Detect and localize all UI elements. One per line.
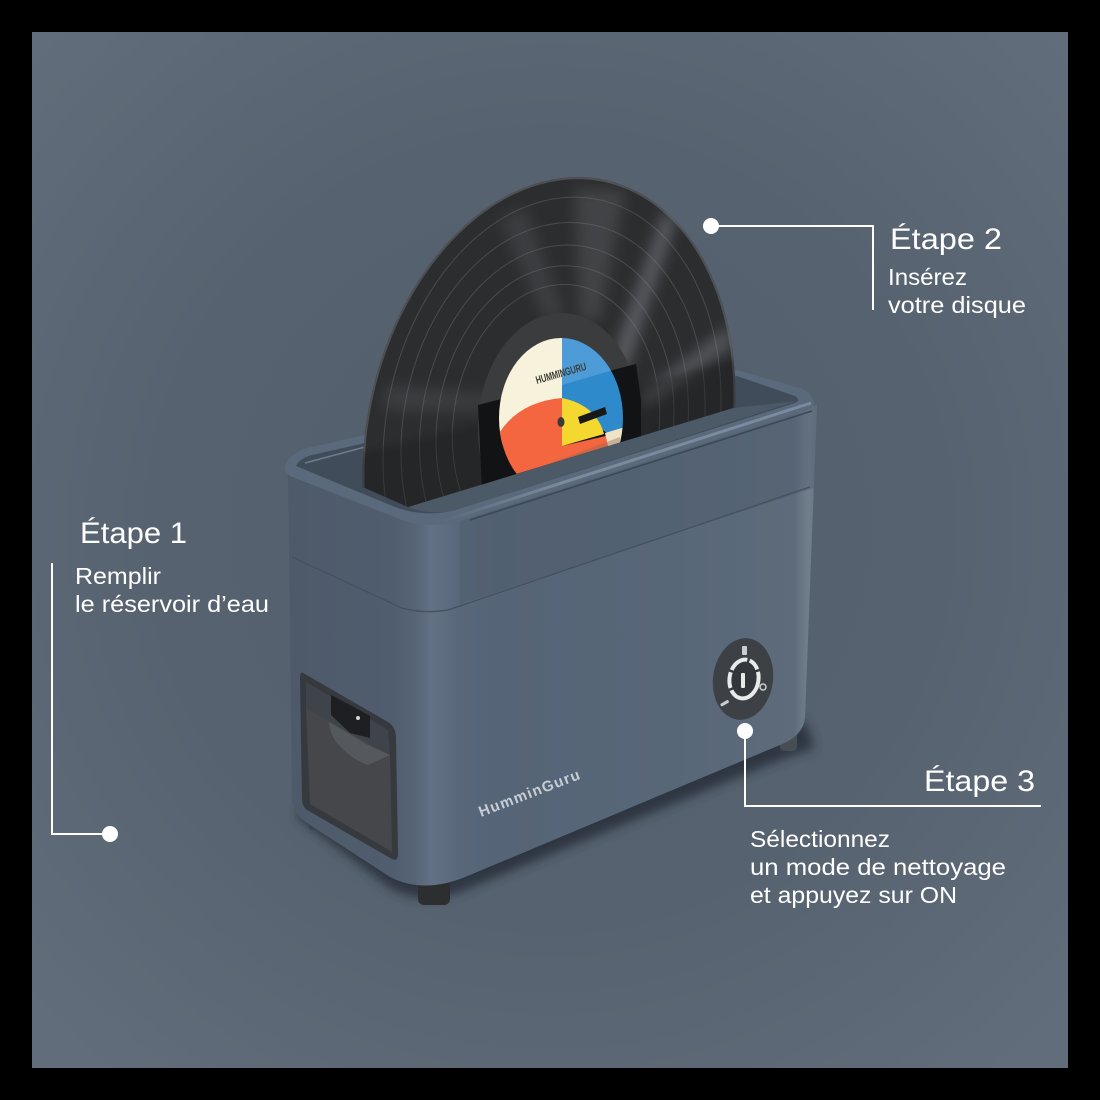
lower inner floor (408, 401, 797, 512)
callout: étape 3 (737, 723, 1041, 908)
power mark (741, 673, 745, 688)
body 1: le réservoir d’eau (75, 591, 269, 617)
anchor dot 1 (102, 826, 118, 842)
device left face (296, 521, 460, 886)
hatch frame (300, 673, 398, 860)
record label (499, 338, 623, 474)
heading 1: Étape 1 (80, 517, 187, 550)
front rim highlight (440, 403, 811, 522)
top rim (285, 370, 814, 525)
pump highlight (356, 716, 360, 720)
dial (708, 634, 778, 724)
floor shadow (298, 720, 815, 898)
body 3: et appuyez sur ON (750, 882, 957, 908)
upper section shading (796, 405, 817, 493)
heading 2: Étape 2 (890, 223, 1002, 256)
label: spindle hole (558, 417, 564, 427)
dial ring (727, 658, 761, 700)
mode icon right (760, 684, 766, 690)
label: sticker (578, 407, 607, 424)
product: record cleaning machine (280, 141, 830, 910)
callout: étape 1 (52, 517, 269, 842)
body 2: votre disque (888, 292, 1026, 318)
callout: étape 2 (703, 218, 1026, 318)
mode icon top (742, 646, 747, 655)
label: brand text: HUMMINGURU (535, 361, 588, 387)
device body (296, 405, 817, 886)
sheen wedges (355, 190, 745, 520)
feet (309, 730, 797, 905)
dead wax (478, 314, 628, 455)
leader line 2 (711, 226, 873, 310)
leader line 1 (52, 563, 110, 834)
label: yellow quadrant (562, 398, 604, 446)
rim shadow line (470, 411, 812, 520)
body 3: Sélectionnez (750, 826, 890, 852)
body 3: un mode de nettoyage (750, 854, 1006, 880)
hatch interior (306, 682, 390, 755)
inner lip highlight (305, 447, 365, 463)
body 1: Remplir (75, 563, 161, 589)
label: blue quadrant (562, 338, 623, 442)
label: cream quadrant (495, 335, 562, 445)
label: cream corner (605, 428, 622, 446)
brand logo: HumminGuru (476, 767, 582, 821)
label: orange arc (500, 398, 612, 474)
anchor dot 3 (737, 723, 753, 739)
anchor dot 2 (703, 218, 719, 234)
tank window (306, 708, 392, 852)
control panel (708, 634, 778, 724)
device front face (460, 405, 817, 879)
pump detail (331, 695, 370, 738)
grooves (382, 196, 722, 506)
disc (362, 177, 736, 507)
opening interior (296, 376, 798, 513)
heading 3: Étape 3 (924, 765, 1035, 798)
seam line (292, 487, 810, 612)
disc edge (362, 177, 736, 488)
tank tab (329, 722, 390, 765)
vinyl record (362, 177, 736, 507)
body 2: Insérez (888, 264, 967, 290)
dead wax shadow band (478, 364, 641, 484)
water tank hatch (300, 673, 398, 860)
lower shadow band (362, 360, 736, 507)
leader line 3 (745, 732, 1041, 806)
mode icon left (720, 700, 729, 707)
label: reflection (547, 437, 620, 464)
